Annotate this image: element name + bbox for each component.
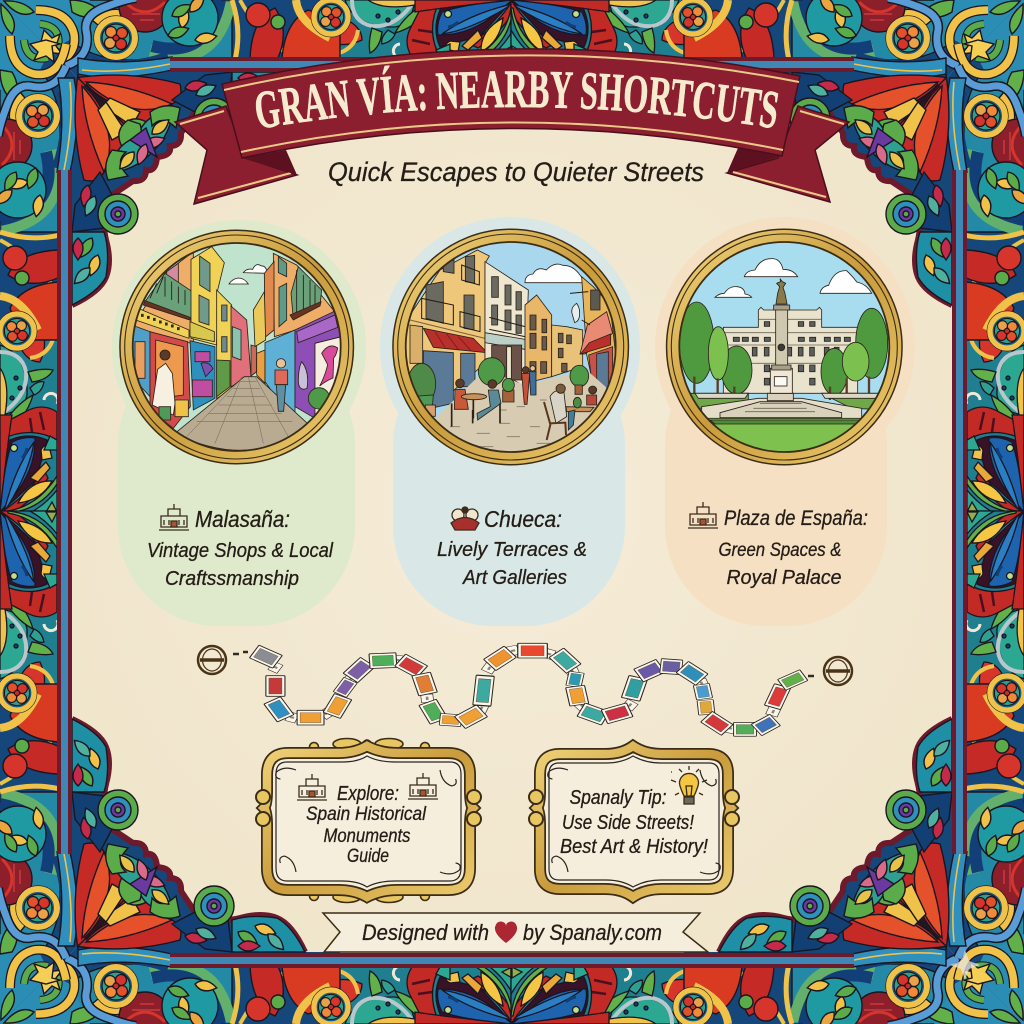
footer ribbon credit <box>323 913 708 952</box>
gold ring <box>393 230 628 464</box>
panel: Chueca <box>380 217 640 626</box>
callout: Spanaly tip <box>529 746 739 897</box>
ornate border: bottom edge motif <box>330 966 694 1024</box>
description: Chueca <box>437 539 587 589</box>
icon: light bulb <box>671 766 707 804</box>
description: Plaza de España: Green Spaces & <box>718 540 842 561</box>
frame flourishes top and bottom <box>310 738 430 902</box>
scene: Chueca terraces <box>400 240 620 460</box>
icon: historic building left <box>297 774 327 800</box>
label: Malasaña: Malasaña: <box>195 506 290 532</box>
Explore text: Guide <box>347 846 389 867</box>
corner ornament: top right <box>673 0 1024 351</box>
footer ribbon credit: Designed with <box>362 920 489 945</box>
route: winding metro line <box>198 643 852 736</box>
description: Malasaña: Vintage Shops & Local <box>147 540 333 562</box>
Explore text <box>306 783 427 867</box>
frame side curls <box>256 790 481 826</box>
Explore text: Explore: <box>337 783 399 805</box>
icon: historic building right <box>408 773 438 799</box>
ornate border: top edge motif <box>330 0 694 58</box>
icon: shop building <box>159 504 189 530</box>
panel: Plaza de España <box>655 217 915 626</box>
description: Plaza de España: Royal Palace <box>726 567 842 589</box>
title: GRAN VÍA: NEARBY SHORTCUTS <box>256 65 778 128</box>
subtitle: Quick Escapes to Quieter Streets <box>328 157 704 187</box>
ribbon main band <box>222 49 800 158</box>
ornate border: left edge motif <box>0 330 58 694</box>
route segments <box>249 643 808 736</box>
scene: Malasaña street <box>128 240 345 457</box>
ribbon left tail <box>175 106 297 204</box>
corner ornament: bottom left <box>0 673 351 1024</box>
scene: Plaza de España <box>675 240 892 458</box>
ornate border: right edge motif <box>966 330 1024 694</box>
tip text: Spanaly Tip: <box>570 787 666 809</box>
frame side curls <box>529 790 739 826</box>
corner ornament: top left <box>0 0 351 351</box>
label: Chueca: Chueca: <box>484 506 562 532</box>
icon: palace <box>688 502 718 528</box>
gold ring <box>120 230 353 464</box>
icon: metro start sign <box>198 646 226 674</box>
border frame line <box>57 57 967 968</box>
icon: metro end sign <box>824 657 852 685</box>
gold ring <box>667 230 902 464</box>
description: Plaza de España <box>718 540 842 589</box>
label: Plaza de España: Plaza de España: <box>724 507 868 530</box>
footer ribbon credit: by Spanaly.com <box>523 920 662 945</box>
description: Malasaña <box>147 540 333 590</box>
callout: Explore guide <box>256 738 481 902</box>
description: Chueca: Art Galleries <box>462 567 567 589</box>
Explore text: Monuments <box>324 826 411 847</box>
watermark sparkle <box>950 950 980 980</box>
tip text <box>560 787 708 858</box>
icon: heart <box>495 922 517 943</box>
description: Chueca: Lively Terraces & <box>437 539 587 561</box>
icon: terrace masks <box>451 507 479 530</box>
description: Malasaña: Craftssmanship <box>165 568 299 590</box>
tip text: Use Side Streets! <box>562 812 694 834</box>
title ribbon <box>174 48 850 206</box>
tip text: Best Art & History! <box>560 836 708 858</box>
panel: Malasaña <box>112 220 366 626</box>
Explore text: Spain Historical <box>306 804 427 825</box>
corner ornament: bottom right <box>673 673 1024 1024</box>
ribbon right tail <box>727 106 849 202</box>
